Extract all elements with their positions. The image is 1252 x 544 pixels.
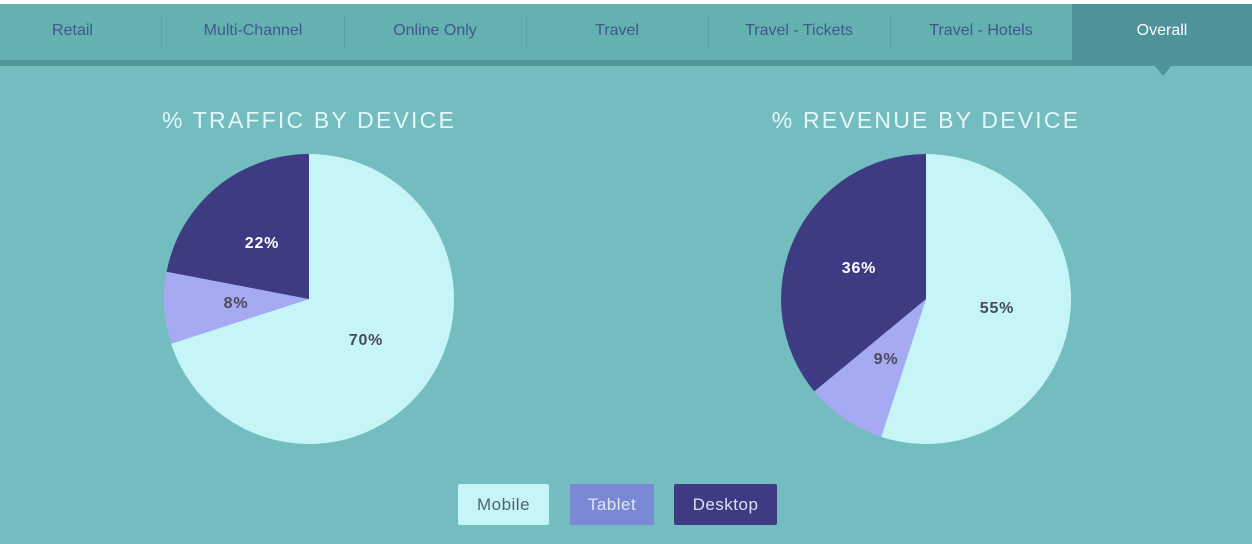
pie: traffic: 70%	[349, 332, 383, 349]
pie: revenue: 55%	[980, 300, 1014, 317]
tab: Retail: Retail	[52, 22, 93, 39]
legend: Desktop	[674, 484, 777, 525]
nav bar	[0, 4, 1252, 66]
pie: revenue	[781, 154, 1071, 444]
pie: traffic	[164, 154, 454, 444]
legend: Mobile: Mobile	[477, 495, 530, 514]
title: revenue: % REVENUE BY DEVICE	[772, 107, 1080, 133]
legend: Tablet	[570, 484, 654, 525]
tab: Overall (active): Overall	[1137, 22, 1187, 39]
pie: revenue: 36%	[842, 260, 876, 277]
tab: Overall (active)	[1072, 4, 1252, 66]
legend: Mobile	[458, 484, 549, 525]
tab: Travel - Tickets: Travel - Tickets	[745, 22, 853, 39]
tab: Travel: Travel	[595, 22, 639, 39]
legend: Tablet: Tablet	[588, 495, 636, 514]
pie: revenue: 9%	[874, 351, 898, 368]
pie: traffic: 8%	[224, 295, 248, 312]
active tab pointer	[1155, 66, 1171, 76]
tab: Multi-Channel: Multi-Channel	[204, 22, 302, 39]
tab: Online Only: Online Only	[393, 22, 477, 39]
legend: Desktop: Desktop	[693, 495, 758, 514]
title: traffic: % TRAFFIC BY DEVICE	[162, 107, 456, 133]
tab: Travel - Hotels: Travel - Hotels	[929, 22, 1033, 39]
pie: traffic: 22%	[245, 235, 279, 252]
